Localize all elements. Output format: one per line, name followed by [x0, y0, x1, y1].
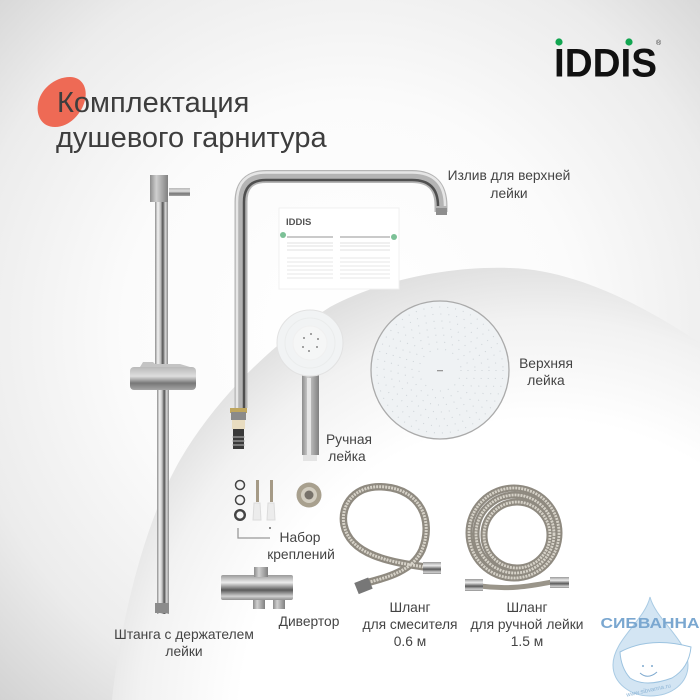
mounting kit	[235, 480, 275, 538]
label: rail: Штанга с держателем	[114, 627, 254, 642]
label: long hose: 1.5 м	[511, 634, 543, 649]
long hose 1.5 m	[465, 488, 569, 591]
watermark: Sibvanna logo	[600, 597, 700, 699]
label: hand shower: Ручная	[326, 432, 372, 447]
label: short hose: для смесителя	[363, 617, 457, 632]
label: mounting kit: Набор	[280, 530, 321, 545]
label: short hose: 0.6 м	[394, 634, 426, 649]
label: hand shower: лейка	[328, 449, 366, 464]
label: overhead shower: лейка	[527, 373, 565, 388]
hand shower	[277, 310, 343, 461]
instruction sheet	[279, 208, 399, 289]
title: Комплектация	[57, 87, 249, 119]
IDDIS logo: IDDIS	[554, 42, 657, 86]
title	[56, 87, 327, 154]
overhead shower head	[371, 301, 509, 439]
upper spout pipe	[230, 172, 447, 449]
watermark: Sibvanna logo: www.sibvanna.ru	[625, 683, 672, 699]
label: short hose: Шланг	[389, 600, 431, 615]
title: душевого гарнитура	[56, 122, 327, 154]
instruction sheet: IDDIS	[286, 217, 311, 228]
short hose 0.6 m	[343, 487, 441, 594]
sliding rail with holder	[130, 175, 196, 614]
IDDIS logo: ®	[656, 39, 662, 47]
label: diverter: Дивертор	[279, 614, 340, 629]
watermark: Sibvanna logo: СИБВАННА	[600, 616, 700, 632]
label: spout: Излив для верхней	[448, 168, 570, 183]
accent blob	[38, 77, 86, 127]
diverter	[221, 567, 293, 609]
label: spout	[448, 168, 570, 201]
label: long hose: для ручной лейки	[470, 617, 584, 632]
label: hand shower	[326, 432, 372, 464]
label: long hose	[470, 600, 584, 649]
label: mounting kit: креплений	[267, 547, 335, 562]
label: short hose	[363, 600, 457, 649]
label: rail: лейки	[165, 644, 203, 659]
label: long hose: Шланг	[506, 600, 548, 615]
label: rail	[114, 627, 254, 659]
label: mounting kit	[267, 530, 335, 562]
white arc panel	[112, 268, 700, 700]
label: overhead shower: Верхняя	[519, 356, 573, 371]
label: spout: лейки	[490, 186, 528, 201]
label: overhead shower	[519, 356, 573, 388]
wall flange	[296, 482, 322, 508]
